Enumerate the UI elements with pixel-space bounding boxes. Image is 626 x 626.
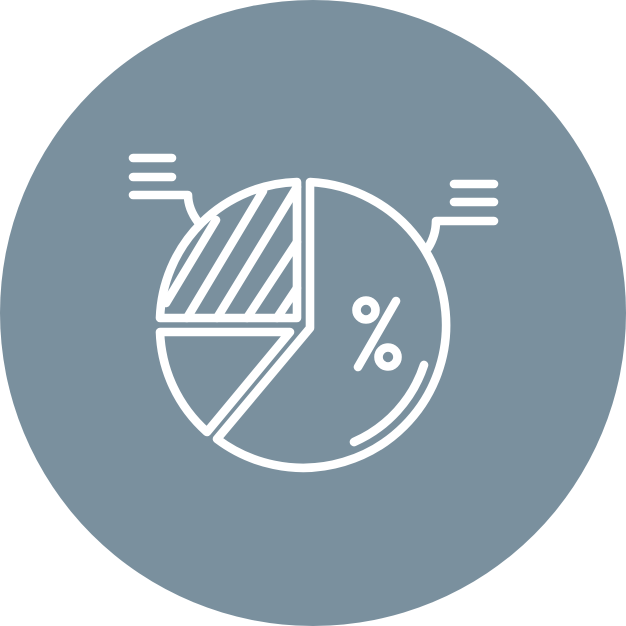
pie chart icon xyxy=(133,158,494,468)
left legend lines xyxy=(133,158,198,222)
hatched slice xyxy=(160,182,297,318)
lower left slice xyxy=(160,332,290,432)
hatch lines xyxy=(166,187,297,318)
highlight arc xyxy=(354,365,424,442)
big slice xyxy=(217,182,446,468)
right legend lines xyxy=(428,184,494,248)
percent sign xyxy=(356,300,398,367)
